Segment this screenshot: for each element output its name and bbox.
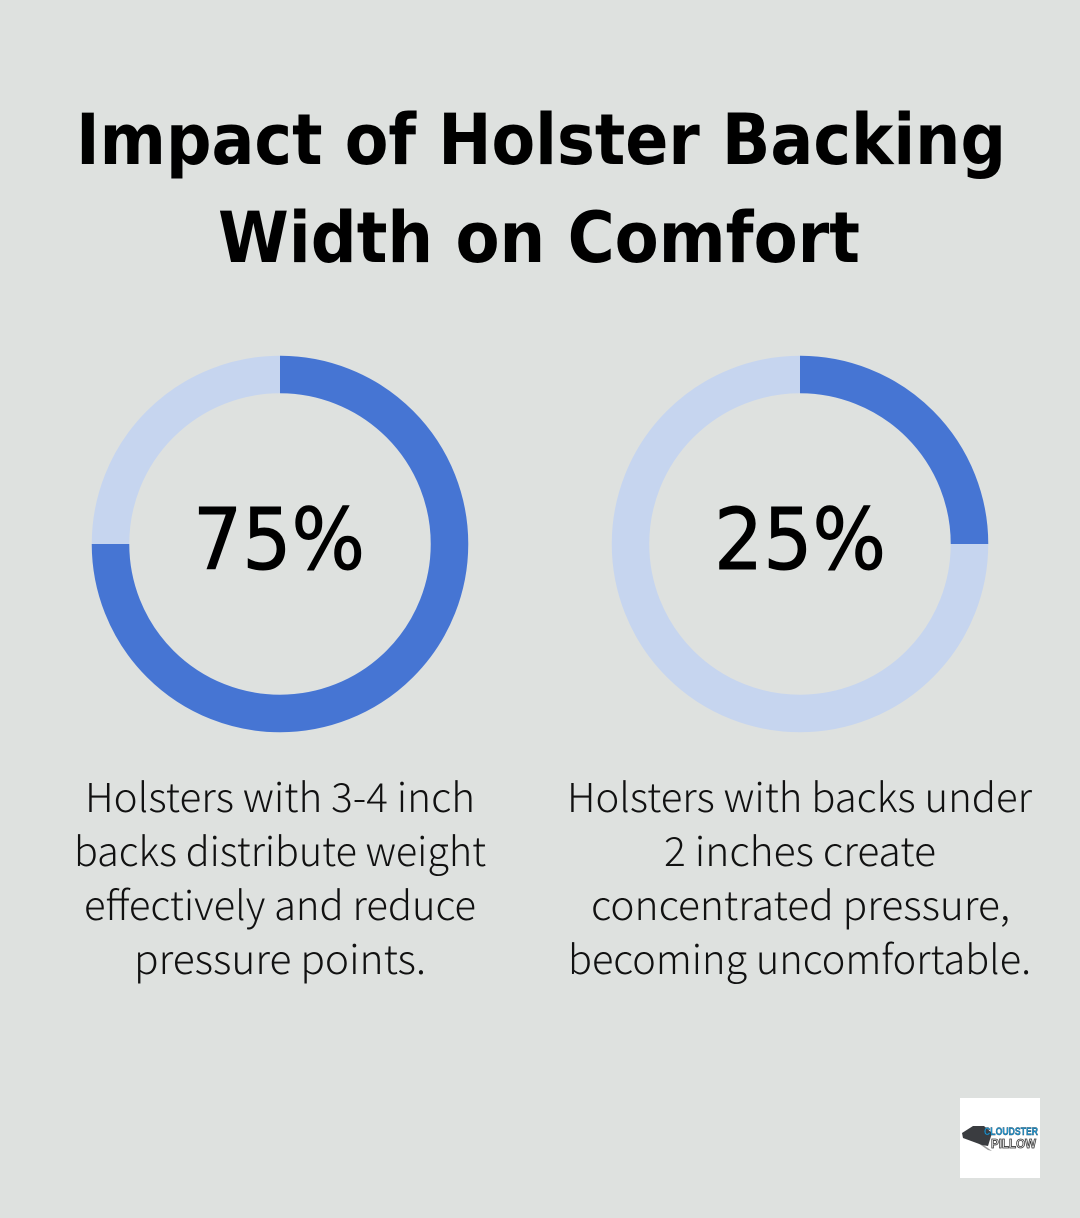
- description: backs under 2 inches: concentrated pressure,: [591, 874, 1010, 932]
- description: 3-4 inch backs: [74, 766, 486, 986]
- value: 25%: 25%: [714, 491, 886, 590]
- description: backs under 2 inches: becoming uncomfortable.: [568, 928, 1031, 986]
- logo: Cloudster Pillow: PILLOW: [991, 1136, 1037, 1151]
- panel: 25 percent stat: [567, 374, 1033, 986]
- value: 75%: 75%: [193, 491, 365, 590]
- donut chart: 25%: [630, 374, 970, 714]
- description: 3-4 inch backs: effectively and reduce: [84, 874, 476, 932]
- description: 3-4 inch backs: backs distribute weight: [74, 820, 486, 878]
- panel: 75 percent stat: [74, 374, 486, 986]
- description: backs under 2 inches: 2 inches create: [664, 820, 936, 878]
- title: Impact of Holster Backing: [76, 99, 1006, 181]
- description: 3-4 inch backs: pressure points.: [134, 928, 426, 986]
- description: 3-4 inch backs: Holsters with 3-4 inch: [85, 766, 475, 824]
- description: backs under 2 inches: [567, 766, 1033, 986]
- title: Width on Comfort: [218, 197, 860, 279]
- title: [76, 99, 1006, 279]
- logo: Cloudster Pillow: CLOUDSTER: [984, 1126, 1038, 1138]
- logo: Cloudster Pillow: [960, 1098, 1040, 1178]
- donut chart: 75%: [110, 374, 450, 714]
- description: backs under 2 inches: Holsters with backs under: [567, 766, 1033, 824]
